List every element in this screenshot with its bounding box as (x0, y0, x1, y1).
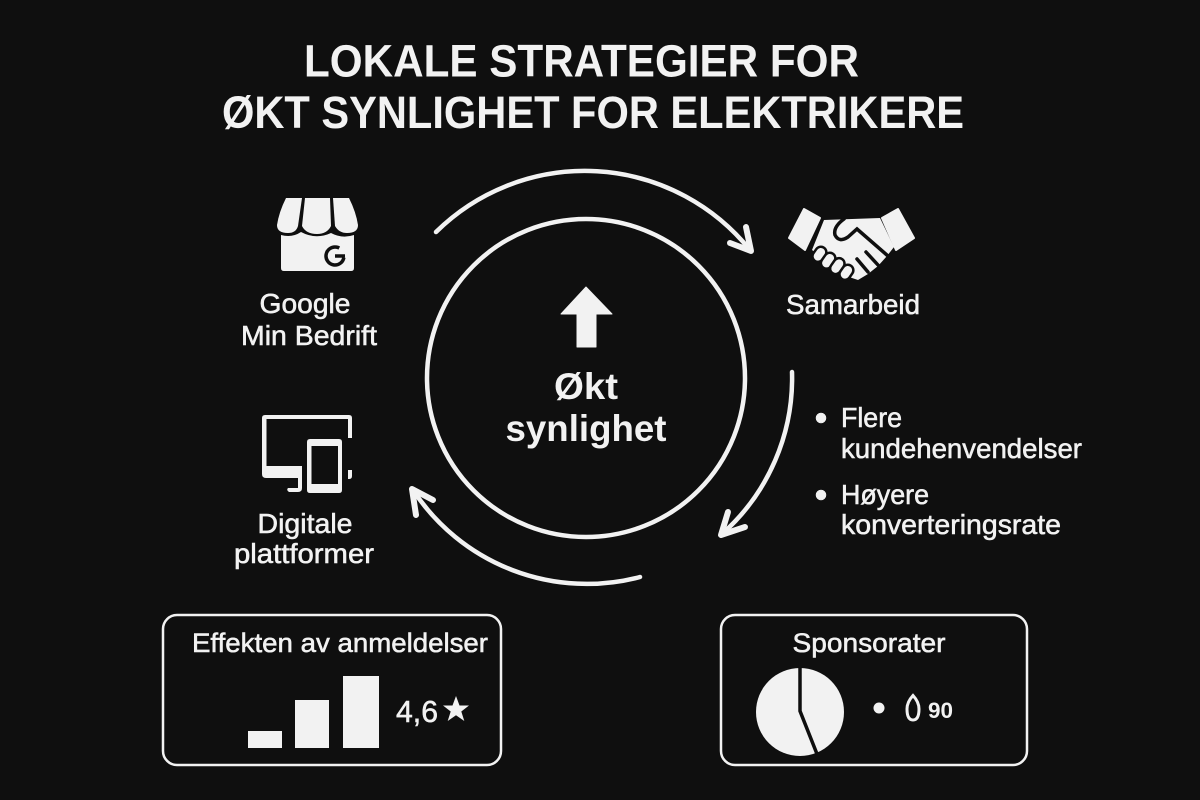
benefits list: konverteringsrate (841, 509, 1061, 540)
benefits list (816, 402, 1082, 540)
label: Google Min Bedrift: Google (260, 288, 350, 319)
hands (812, 218, 894, 280)
rating (396, 694, 469, 729)
label: Google Min Bedrift: Min Bedrift (241, 320, 377, 351)
left cuff (789, 209, 820, 250)
panel heading: Effekten av anmeldelser (192, 628, 488, 658)
icon: up arrow (561, 287, 612, 347)
panel: Effekten av anmeldelser (163, 615, 501, 765)
value: 0 90 (907, 696, 953, 723)
title (222, 36, 964, 138)
central circle: økt synlighet (427, 219, 745, 537)
bar chart (248, 676, 379, 748)
icon: Google storefront (277, 198, 358, 271)
central label: synlighet (506, 408, 666, 449)
panel heading: Sponsorater (792, 628, 946, 658)
benefits list: kundehenvendelser (841, 433, 1082, 464)
label: Samarbeid: Samarbeid (786, 289, 920, 320)
label: Digitale plattformer: plattformer (234, 538, 374, 569)
title: ØKT SYNLIGHET FOR ELEKTRIKERE (222, 87, 964, 138)
central label (506, 366, 666, 449)
label: Google Min Bedrift (241, 288, 377, 351)
panel: Sponsorater (721, 615, 1027, 765)
right cuff (882, 209, 914, 250)
pie chart (756, 666, 844, 756)
arrow: bottom, to Digitale plattformer (412, 489, 640, 584)
arrow: top, Google to Samarbeid (436, 171, 751, 251)
label: Digitale plattformer: Digitale (258, 508, 352, 539)
label: Digitale plattformer (234, 508, 374, 569)
fingers (810, 245, 856, 282)
arrow: right, Samarbeid down (721, 372, 792, 535)
value: 0 90: 90 (928, 698, 953, 723)
benefits list: Flere (841, 402, 902, 433)
central label: Økt (554, 366, 618, 407)
bullet (874, 702, 884, 714)
rating: 4,6 (396, 694, 438, 729)
title: LOKALE STRATEGIER FOR (304, 36, 859, 86)
icon: digital platforms (262, 415, 352, 493)
benefits list: Høyere (841, 479, 929, 510)
icon: handshake (789, 209, 914, 282)
